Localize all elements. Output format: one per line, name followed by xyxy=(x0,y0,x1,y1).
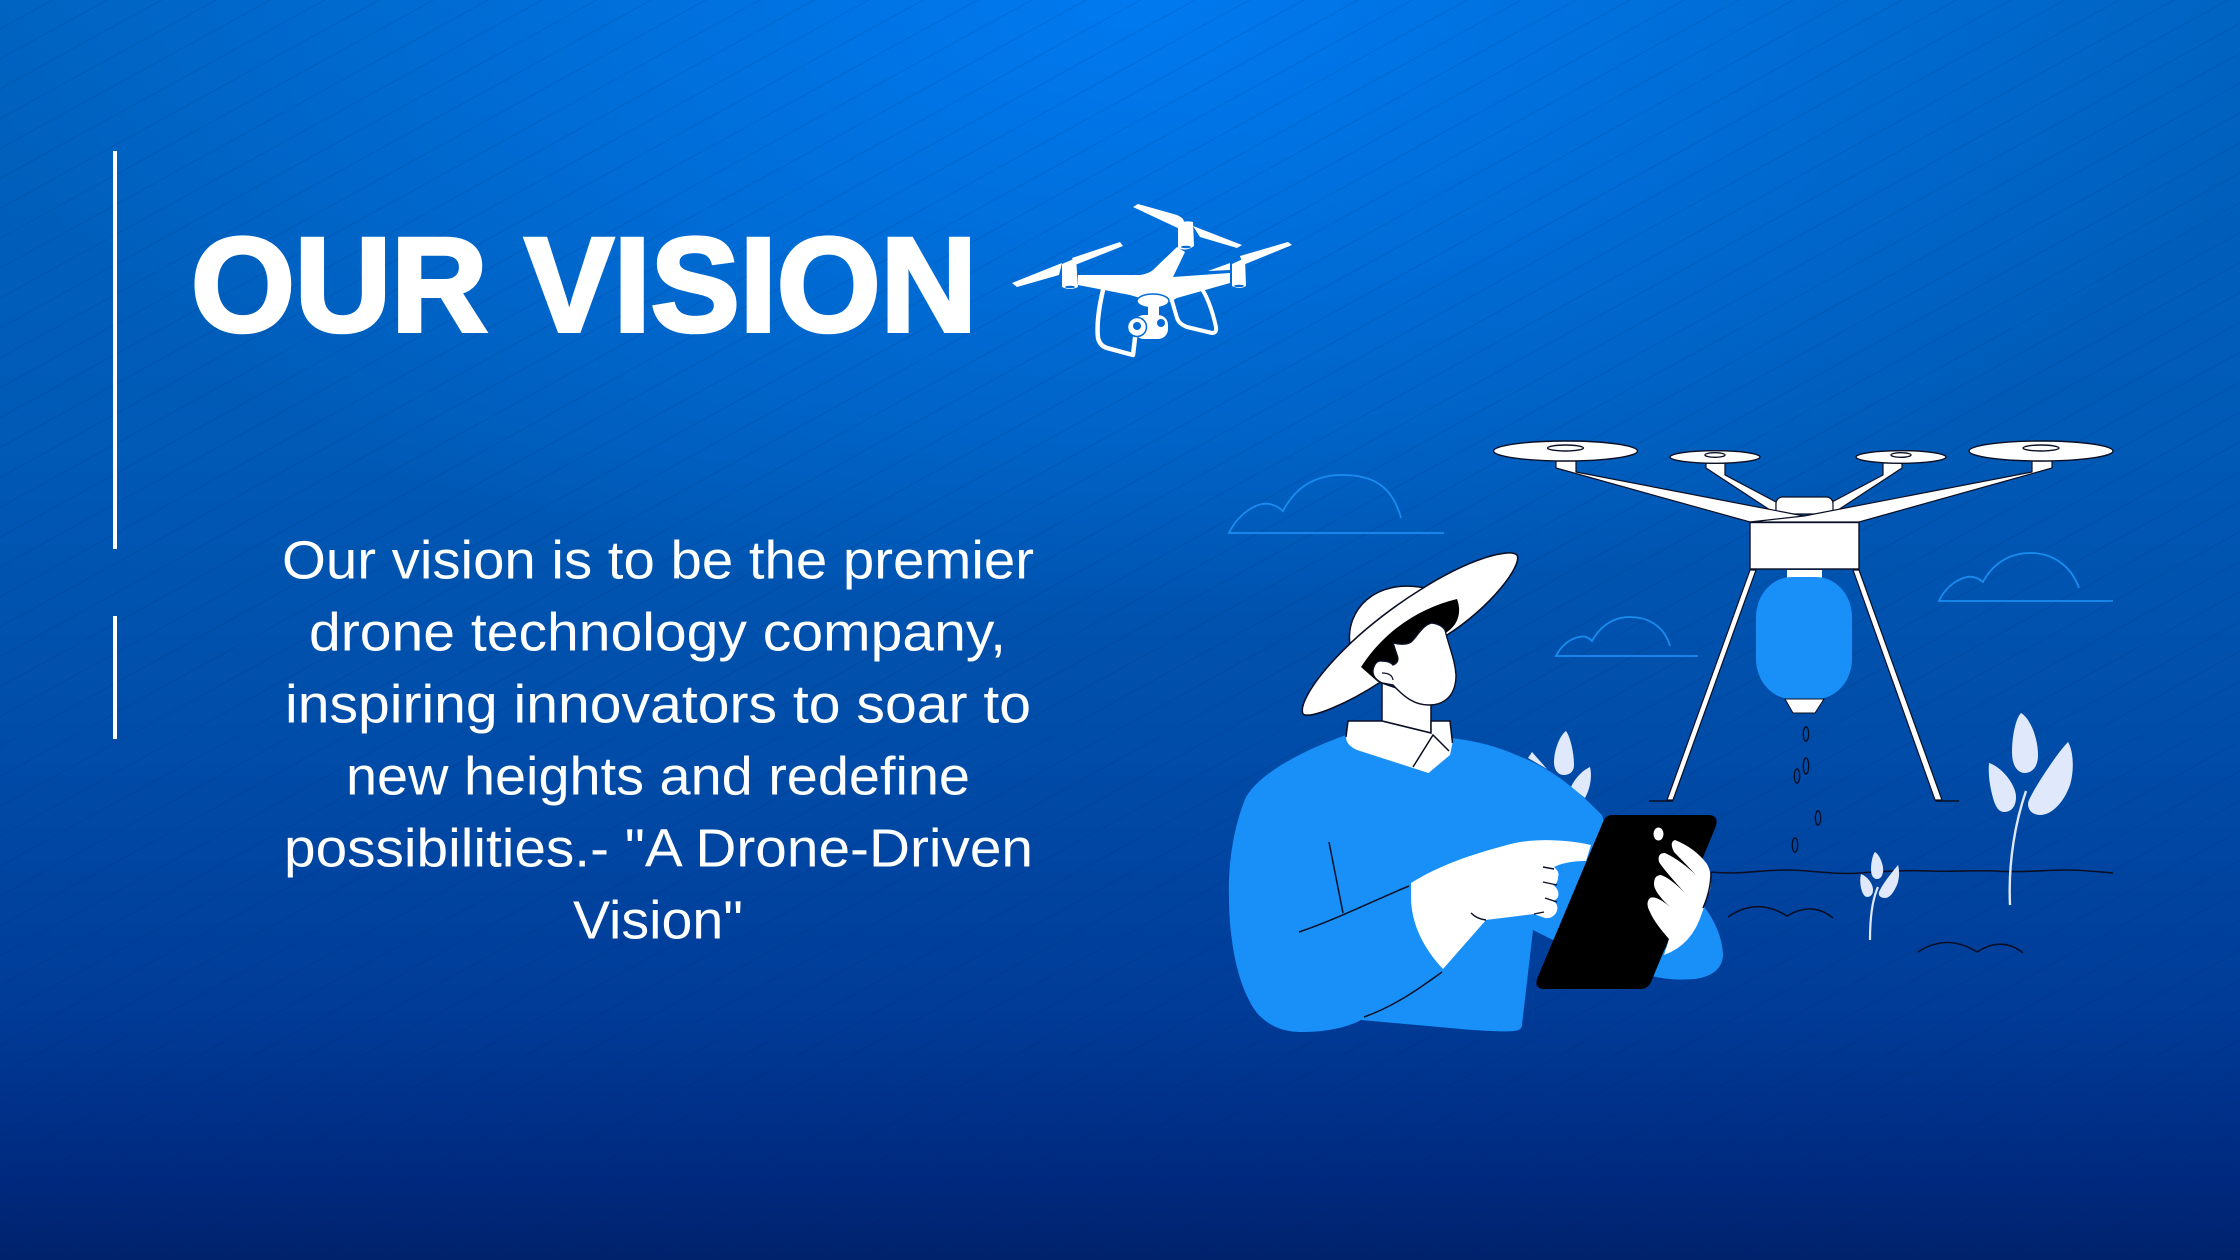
vision statement text: new heights and redefine xyxy=(346,746,970,806)
gimbal camera xyxy=(1128,294,1169,339)
hair xyxy=(1361,599,1459,682)
vision statement text xyxy=(282,530,1034,950)
drone: tank connector xyxy=(1787,570,1822,578)
plant: small seedling xyxy=(1860,852,1899,940)
sweater far sleeve xyxy=(1652,905,1723,980)
vision statement text: Our vision is to be the premier xyxy=(282,530,1034,590)
pointing hand xyxy=(1411,840,1591,969)
blue sweater xyxy=(1229,735,1620,1032)
drone: blue seed tank xyxy=(1756,577,1852,699)
ground line xyxy=(1711,870,2113,873)
title: OUR VISION xyxy=(191,211,977,360)
drone: legs xyxy=(1649,570,1959,801)
farmer xyxy=(1229,553,1723,1032)
vision statement text: possibilities.- "A Drone-Driven xyxy=(284,818,1033,878)
drone body and motors xyxy=(1062,221,1246,302)
landing skids xyxy=(1098,282,1216,355)
knuckle lines xyxy=(1471,867,1557,920)
propellers xyxy=(1012,204,1292,287)
face xyxy=(1373,623,1456,705)
motor bases xyxy=(1065,246,1244,288)
neck xyxy=(1382,683,1431,733)
illustration: farmer with agricultural drone xyxy=(1229,441,2113,1032)
hand outline xyxy=(1703,872,1711,908)
shirt collar xyxy=(1346,721,1452,773)
vision statement text: Vision" xyxy=(573,890,743,950)
plant: large seedling xyxy=(1989,713,2073,905)
sweater fold lines xyxy=(1299,842,1442,1017)
vision statement text: inspiring innovators to soar to xyxy=(285,674,1031,734)
tablet xyxy=(1536,815,1717,989)
drone: seed droplets xyxy=(1792,727,1821,852)
hat crown xyxy=(1349,586,1425,645)
hat brim xyxy=(1302,553,1518,715)
drone: rotors xyxy=(1494,441,2113,463)
icon: quadcopter camera drone xyxy=(1012,204,1292,355)
vision statement text: drone technology company, xyxy=(309,602,1006,662)
plant: seedling behind farmer xyxy=(1528,731,1591,798)
drone: nozzle xyxy=(1785,699,1824,713)
ear detail xyxy=(1382,673,1393,680)
holding hand xyxy=(1648,840,1711,955)
drone: body box xyxy=(1750,522,1859,569)
drone: masts and arms xyxy=(1556,461,2052,522)
soil mounds xyxy=(1728,907,2023,953)
clouds xyxy=(1229,475,2113,656)
tablet camera dot xyxy=(1654,828,1664,840)
collar lines xyxy=(1346,721,1452,767)
accent vertical lines xyxy=(113,151,117,739)
